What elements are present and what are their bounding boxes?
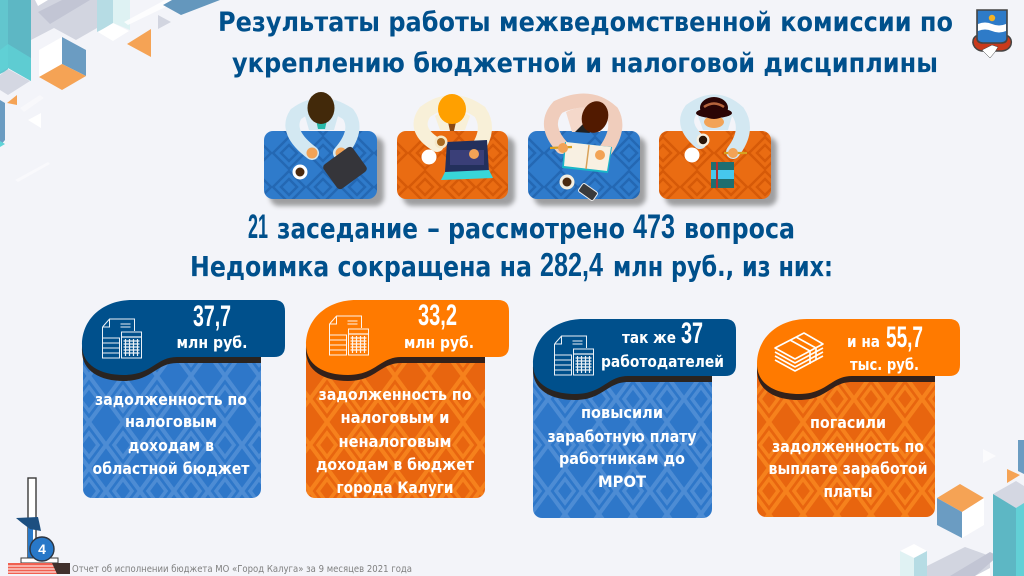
panel: employers raised wages: заработную плату (548, 427, 697, 446)
panel: employers raised wages: 37 (681, 317, 703, 350)
panel: city budget arrears: доходам в бюджет (316, 455, 475, 474)
subheading: arrears: Недоимка сокращена на (190, 250, 532, 283)
panel: regional budget arrears (82, 300, 285, 498)
subheading: meetings (248, 208, 795, 246)
icon: documents and calculator (554, 336, 594, 375)
panel: regional budget arrears: налоговым (125, 412, 217, 431)
panel: wage arrears repaid (757, 319, 960, 517)
subheading: meetings: – (427, 212, 440, 245)
panel: city budget arrears: неналоговым (338, 432, 452, 451)
panel: regional budget arrears: задолженность по (95, 390, 247, 409)
subheading: meetings: заседание (277, 212, 418, 245)
panel: wage arrears repaid: и на (847, 332, 880, 351)
subheading: meetings: рассмотрено (448, 212, 625, 245)
panel: wage arrears repaid: платы (824, 482, 872, 501)
panel: city budget arrears: 33,2 (418, 299, 457, 332)
table scene: person with gift box (659, 97, 777, 206)
panel: wage arrears repaid: 55,7 (886, 321, 923, 354)
subheading: arrears: 282,4 (540, 246, 603, 283)
panel: wage arrears repaid: задолженность по (772, 437, 924, 456)
subheading: meetings: вопроса (684, 212, 795, 245)
panel: city budget arrears: налоговым и (340, 408, 450, 427)
panel: regional budget arrears: областной бюджет (92, 459, 250, 478)
icon: documents and calculator (102, 319, 142, 358)
table scene: person with laptop (397, 94, 515, 206)
subheading: meetings: 473 (633, 208, 675, 246)
decoration: bottom-right geometric shapes (900, 440, 1024, 576)
page number: 4 (38, 541, 46, 557)
panel: city budget arrears: млн руб. (404, 333, 474, 352)
panel: city budget arrears (306, 299, 509, 498)
panel: regional budget arrears: доходам в (128, 436, 214, 455)
footer note: Отчет об исполнении бюджета МО «Город Калуга» за 9 месяцев 2021 года (72, 564, 412, 575)
icon: Kaluga coat of arms (973, 10, 1011, 58)
panel: wage arrears repaid: выплате заработой (768, 459, 928, 478)
title: укреплению бюджетной и налоговой дисциплины (232, 48, 938, 79)
panel: wage arrears repaid: тыс. руб. (850, 355, 919, 374)
subheading: arrears (190, 246, 833, 283)
panel: regional budget arrears: 37,7 (193, 300, 231, 333)
table scene: person with tablet (264, 92, 384, 206)
subheading: arrears: млн руб., из них: (613, 250, 833, 283)
icon: monument with page number (8, 478, 70, 574)
panel: employers raised wages (533, 317, 736, 518)
subheading: meetings: 21 (248, 208, 268, 246)
panel: city budget arrears: города Калуги (336, 478, 454, 497)
panel: city budget arrears: задолженность по (318, 385, 472, 404)
panel: wage arrears repaid: погасили (810, 413, 886, 432)
title (218, 7, 953, 79)
panel: employers raised wages: повысили (581, 403, 663, 422)
table scene: person with notebook (528, 98, 646, 206)
panel: employers raised wages: работодателей (601, 352, 724, 371)
panel: employers raised wages: работникам до (559, 449, 685, 468)
panel: regional budget arrears: млн руб. (176, 333, 248, 352)
icon: documents and calculator (330, 316, 368, 355)
panel: employers raised wages: МРОТ (598, 472, 646, 491)
title: Результаты работы межведомственной комиссии по (218, 7, 953, 38)
panel: employers raised wages: так же (622, 328, 676, 347)
icon: stack of banknotes (775, 333, 823, 371)
decoration: top-left geometric shapes (0, 0, 220, 182)
